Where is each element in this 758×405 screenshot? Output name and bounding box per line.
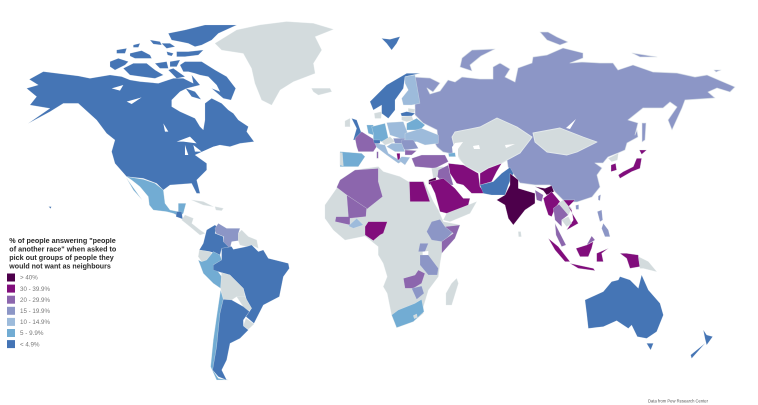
region: Africa [325,167,460,328]
legend title: of another race" when asked to [9,246,116,254]
region: central and southern Europe, Spain and Turkey [340,112,456,168]
region: Russia and China [414,32,735,202]
legend item: over 40: > 40% [20,275,38,282]
legend item: 10-14.9: 10 - 14.9% [20,319,50,326]
region: Australia and New Zealand [585,275,713,358]
legend item: 30-39.9: 30 - 39.9% [20,286,50,293]
legend [7,238,116,348]
region: Greenland and Iceland [215,22,400,105]
legend item: 15-19.9: 15 - 19.9% [20,308,50,315]
region: East and Southeast Asia [518,150,657,272]
legend title: would not want as neighbours [8,264,111,270]
legend item: 20-29.9: 20 - 29.9% [20,297,50,304]
source credit: Data from Pew Research Center [648,398,708,404]
region: Saudi Arabia and Yemen [429,178,477,222]
legend title: % of people answering "people [9,238,116,245]
region: South and Central America [182,215,289,380]
legend item: 5-9.9: 5 - 9.9% [20,330,44,337]
region: Middle East [429,167,443,185]
region: Iran and South Asia [437,163,535,225]
region: North America [27,72,254,219]
legend title: pick out groups of people they [9,255,114,262]
legend item: under 4.9: < 4.9% [20,341,40,348]
legend title [8,238,116,270]
region: Nordic and Baltic countries [370,73,420,122]
region: Canadian Arctic islands [110,25,237,100]
